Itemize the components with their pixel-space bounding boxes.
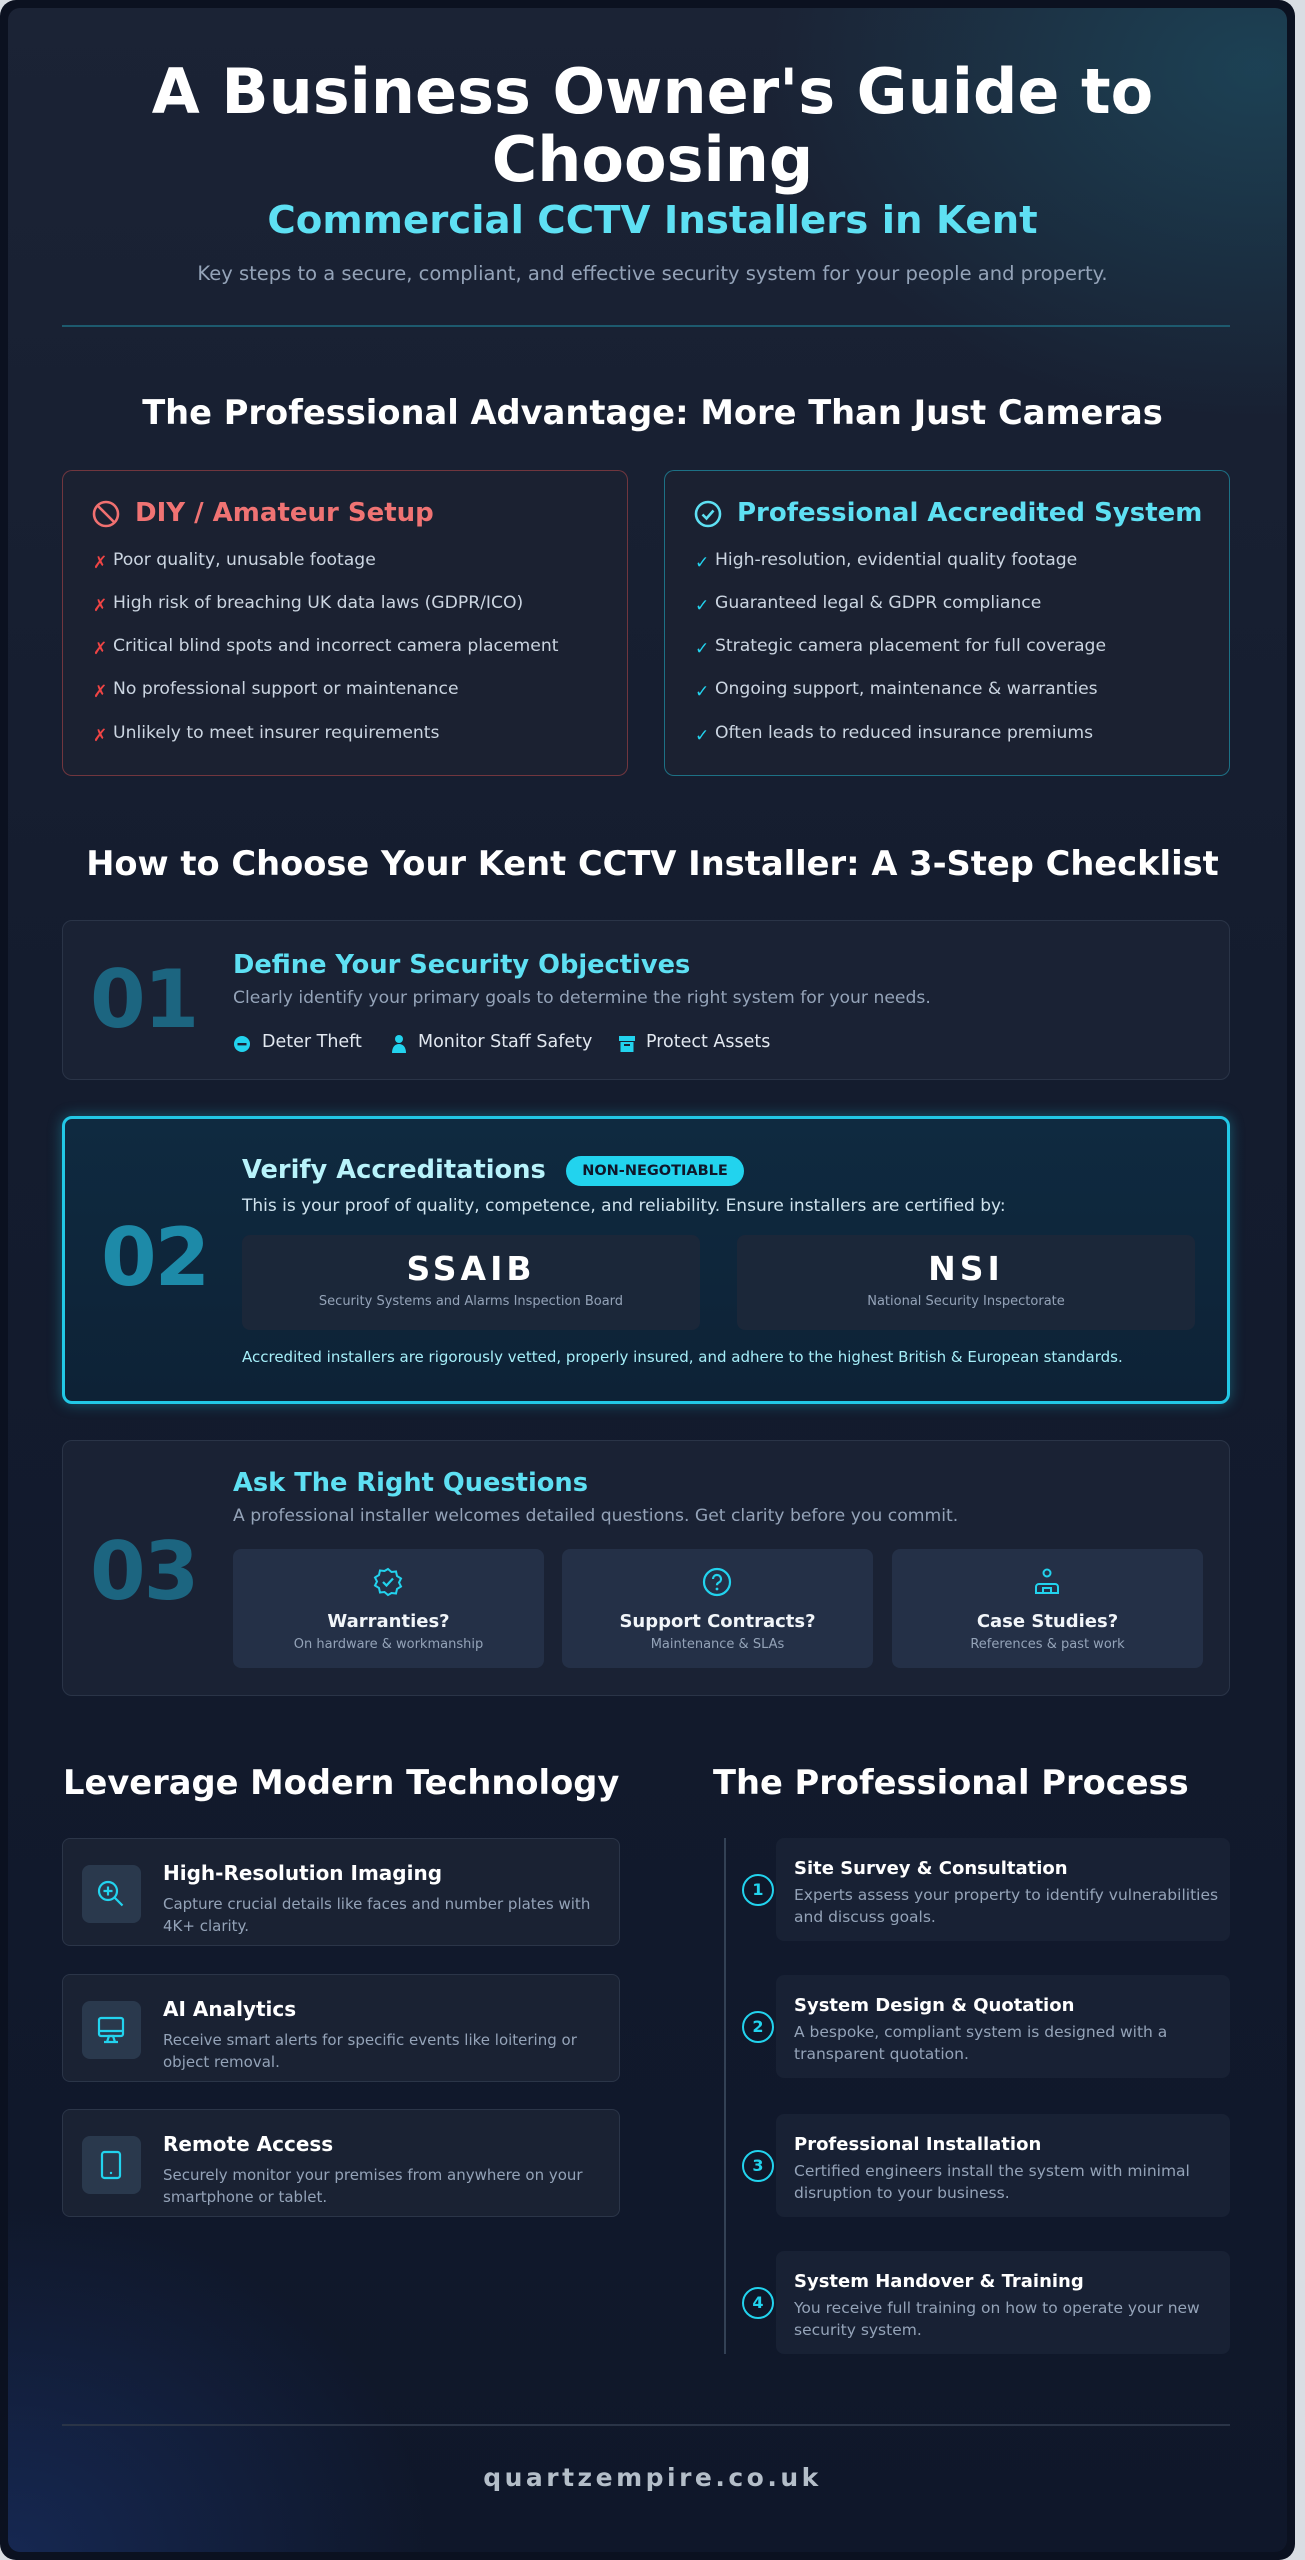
list: DIY drawbacks: ✗ bbox=[93, 596, 107, 616]
question: support contracts: Maintenance & SLAs bbox=[651, 1637, 784, 1652]
step 01 description: Clearly identify your primary goals to determine the right system for your needs. bbox=[233, 988, 931, 1008]
step 02 title + badge: Verify Accreditations bbox=[242, 1155, 546, 1185]
list: professional benefits: Often leads to reduced insurance premiums bbox=[715, 723, 1093, 743]
tech card: remote access: Remote Access bbox=[163, 2132, 333, 2156]
question: case studies bbox=[892, 1549, 1203, 1668]
step 03 description: A professional installer welcomes detailed questions. Get clarity before you commit. bbox=[233, 1506, 958, 1526]
icon: monitor bbox=[82, 2001, 141, 2059]
process step 1 bbox=[742, 1838, 1230, 1941]
tech card: AI analytics bbox=[62, 1974, 620, 2082]
tagline: Key steps to a secure, compliant, and effective security system for your people and property. bbox=[197, 262, 1108, 285]
list: professional benefits bbox=[695, 550, 1106, 746]
process step 2: A bespoke, compliant system is designed with a transparent quotation. bbox=[794, 2023, 1167, 2063]
heading: professional advantage: The Professional Advantage: More Than Just Cameras bbox=[142, 393, 1163, 432]
tech card: AI analytics: Receive smart alerts for specific events like loitering or object removal. bbox=[163, 2031, 577, 2071]
process step 1: 1 bbox=[752, 1880, 764, 1899]
process step 2: 2 bbox=[752, 2017, 764, 2036]
process step 1: Site Survey & Consultation bbox=[794, 1858, 1068, 1879]
tech card: remote access bbox=[62, 2109, 620, 2217]
list: DIY drawbacks: ✗ bbox=[93, 726, 107, 746]
list: professional benefits: Ongoing support, maintenance & warranties bbox=[715, 679, 1098, 699]
panel: professional bbox=[664, 470, 1230, 776]
icon: check circle bbox=[694, 500, 722, 528]
badge: non-negotiable: NON-NEGOTIABLE bbox=[582, 1163, 728, 1179]
list: professional benefits: ✓ bbox=[695, 726, 709, 746]
heading: professional: Professional Accredited System bbox=[737, 498, 1202, 528]
question: case studies: Case Studies? bbox=[977, 1611, 1118, 1632]
tech card: AI analytics: AI Analytics bbox=[163, 1997, 296, 2021]
step 03 title: Ask The Right Questions bbox=[233, 1468, 588, 1498]
process step 3: Certified engineers install the system with minimal disruption to your business. bbox=[794, 2162, 1190, 2202]
title: Choosing bbox=[492, 123, 813, 196]
step 02 footnote: Accredited installers are rigorously vetted, properly insured, and adhere to the highest British & European standards. bbox=[242, 1348, 1123, 1366]
process step 2: System Design & Quotation bbox=[794, 1995, 1074, 2016]
objective tags bbox=[234, 1032, 770, 1053]
list: professional benefits: ✓ bbox=[695, 553, 709, 573]
title bbox=[152, 55, 1153, 196]
list: professional benefits: High-resolution, evidential quality footage bbox=[715, 550, 1077, 570]
list: DIY drawbacks: Unlikely to meet insurer requirements bbox=[113, 723, 439, 743]
step 01 card bbox=[62, 920, 1230, 1080]
question: case studies: References & past work bbox=[970, 1637, 1125, 1652]
title: A Business Owner's Guide to bbox=[152, 55, 1153, 128]
process step 2 bbox=[742, 1975, 1230, 2078]
objective tags: Deter Theft bbox=[262, 1032, 362, 1052]
cert: SSAIB bbox=[242, 1235, 700, 1330]
process step 4: System Handover & Training bbox=[794, 2271, 1084, 2292]
list: professional benefits: Guaranteed legal & GDPR compliance bbox=[715, 593, 1041, 613]
process step 4 bbox=[742, 2251, 1230, 2354]
footer: quartzempire.co.uk bbox=[483, 2463, 822, 2492]
step 03 card bbox=[62, 1440, 1230, 1696]
list: DIY drawbacks: ✗ bbox=[93, 553, 107, 573]
list: professional benefits: ✓ bbox=[695, 639, 709, 659]
icon: tablet bbox=[82, 2136, 141, 2194]
list: DIY drawbacks: Critical blind spots and incorrect camera placement bbox=[113, 636, 559, 656]
step number 03: 03 bbox=[90, 1525, 197, 1618]
step 02 card (highlighted) bbox=[62, 1116, 1230, 1404]
question: warranties: On hardware & workmanship bbox=[294, 1637, 483, 1652]
question: warranties: Warranties? bbox=[327, 1611, 450, 1632]
list: DIY drawbacks: High risk of breaching UK data laws (GDPR/ICO) bbox=[113, 593, 523, 613]
tech card: high-resolution imaging bbox=[62, 1838, 620, 1946]
process step 4: You receive full training on how to operate your new security system. bbox=[794, 2299, 1200, 2339]
list: DIY drawbacks bbox=[93, 550, 559, 746]
process step 3: 3 bbox=[752, 2156, 764, 2175]
list: DIY drawbacks: No professional support or maintenance bbox=[113, 679, 459, 699]
tech card: remote access: Securely monitor your premises from anywhere on your smartphone or tablet. bbox=[163, 2166, 583, 2206]
step 01 title: Define Your Security Objectives bbox=[233, 950, 690, 980]
step 02 description: This is your proof of quality, competence, and reliability. Ensure installers are certified by: bbox=[242, 1196, 1006, 1216]
question: support contracts bbox=[562, 1549, 873, 1668]
heading: professional process: The Professional Process bbox=[713, 1763, 1189, 1802]
process step 3 bbox=[742, 2114, 1230, 2217]
list: DIY drawbacks: ✗ bbox=[93, 639, 107, 659]
badge: non-negotiable bbox=[566, 1156, 744, 1186]
objective tags: Protect Assets bbox=[646, 1032, 770, 1052]
list: professional benefits: ✓ bbox=[695, 596, 709, 616]
objective tags: Monitor Staff Safety bbox=[418, 1032, 592, 1052]
cert: SSAIB: Security Systems and Alarms Inspection Board bbox=[319, 1294, 623, 1309]
heading: modern technology: Leverage Modern Technology bbox=[63, 1763, 619, 1802]
list: professional benefits: Strategic camera placement for full coverage bbox=[715, 636, 1106, 656]
question: support contracts: Support Contracts? bbox=[619, 1611, 816, 1632]
process step 1: Experts assess your property to identify vulnerabilities and discuss goals. bbox=[794, 1886, 1218, 1926]
process step 4: 4 bbox=[752, 2293, 764, 2312]
cert: NSI: National Security Inspectorate bbox=[867, 1294, 1065, 1309]
heading: DIY: DIY / Amateur Setup bbox=[135, 498, 434, 528]
list: DIY drawbacks: Poor quality, unusable footage bbox=[113, 550, 376, 570]
list: DIY drawbacks: ✗ bbox=[93, 682, 107, 702]
list: professional benefits: ✓ bbox=[695, 682, 709, 702]
cert: NSI bbox=[737, 1235, 1195, 1330]
heading: checklist: How to Choose Your Kent CCTV Installer: A 3-Step Checklist bbox=[86, 844, 1219, 883]
panel: DIY bbox=[62, 470, 628, 776]
tech card: high-resolution imaging: Capture crucial details like faces and number plates with 4K+ clarity. bbox=[163, 1895, 590, 1935]
subtitle: Commercial CCTV Installers in Kent bbox=[267, 198, 1038, 243]
icon: zoom bbox=[82, 1865, 141, 1923]
tech card: high-resolution imaging: High-Resolution Imaging bbox=[163, 1861, 442, 1885]
step number 02: 02 bbox=[101, 1211, 208, 1304]
question: warranties bbox=[233, 1549, 544, 1668]
process step 3: Professional Installation bbox=[794, 2134, 1041, 2155]
step 02 title + badge bbox=[242, 1155, 744, 1186]
cert: NSI: NSI bbox=[928, 1249, 1004, 1288]
cert: SSAIB: SSAIB bbox=[406, 1249, 536, 1288]
icon: ban bbox=[92, 500, 120, 528]
step number 01: 01 bbox=[90, 953, 197, 1046]
